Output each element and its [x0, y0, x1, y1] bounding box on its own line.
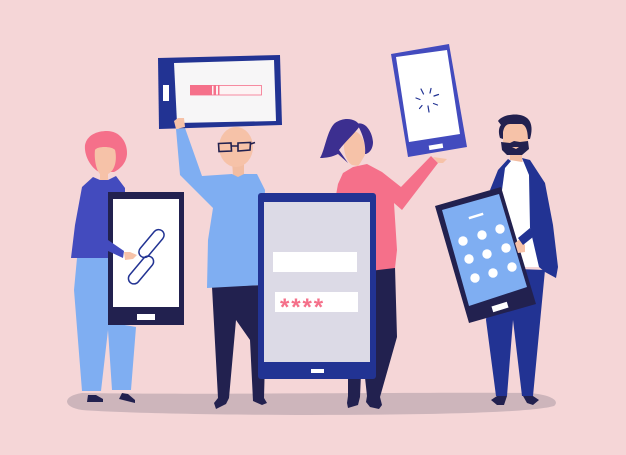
jacket: [490, 159, 511, 190]
trousers: [212, 285, 267, 409]
head: [219, 127, 253, 167]
face: [344, 131, 365, 166]
shoes: [491, 396, 507, 405]
password field: ****: [280, 294, 325, 321]
icon: chain link: [126, 227, 166, 286]
sweater: [71, 176, 125, 258]
username field: [273, 252, 357, 272]
face: [503, 124, 528, 150]
keypad dots: [458, 224, 517, 283]
neck: [232, 160, 244, 178]
man's fingers over tablet: [174, 118, 185, 129]
blue shirt and raised arm: [176, 128, 265, 288]
hair: [498, 114, 532, 139]
trousers: [74, 258, 136, 391]
progress bar: [190, 85, 262, 95]
figure: woman with short indigo hair: [320, 119, 447, 409]
sweater: [336, 156, 438, 271]
hand: [174, 118, 185, 129]
mouth: [512, 147, 519, 149]
figure: bearded man: [486, 114, 558, 405]
phone: link: [108, 192, 184, 325]
tablet: keypad: [435, 187, 536, 323]
tablet: progress bar: [158, 55, 282, 129]
hair: [320, 119, 360, 163]
figure: bald man with glasses: [174, 118, 267, 409]
tablet: loading spinner: [391, 44, 467, 157]
trousers: [347, 267, 397, 409]
face and neck: [95, 147, 116, 181]
neck: [510, 150, 522, 164]
woman's arm over phone: [108, 240, 124, 258]
ground shadow: [67, 393, 556, 415]
hair: [85, 131, 127, 172]
shoes: [87, 395, 103, 402]
figure: woman with link phone: [71, 131, 136, 403]
trousers: [486, 268, 545, 396]
icon: spinner: [416, 88, 438, 112]
glasses: [218, 142, 255, 152]
tablet: login form: [258, 193, 376, 379]
password field: [275, 292, 358, 321]
t-shirt: [502, 160, 539, 267]
man's hand and sleeve: [515, 239, 525, 253]
hand: [433, 157, 447, 163]
beard: [501, 141, 529, 155]
